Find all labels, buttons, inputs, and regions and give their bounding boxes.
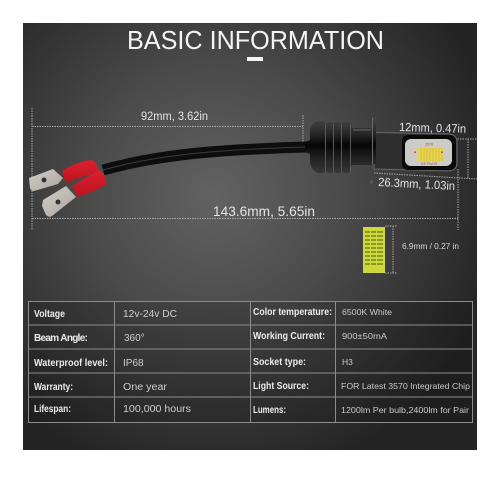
board contacts xyxy=(414,152,443,153)
chip lines xyxy=(421,148,442,161)
dimension label: head width: 12mm, 0.47in xyxy=(399,120,466,136)
specification table xyxy=(28,302,472,422)
terminal: lower xyxy=(42,170,107,217)
board marking: certification: CE RoHS xyxy=(421,162,438,166)
dimension label: chip size: 6.9mm / 0.27 in xyxy=(402,242,459,251)
title underline xyxy=(247,57,263,61)
head frame xyxy=(402,135,456,170)
specification table: IP68 xyxy=(123,358,144,369)
row: socket type: Socket type: xyxy=(253,357,306,368)
specification table: 900±50mA xyxy=(342,331,387,341)
specification table: 1200lm Per bulb,2400lm for Pair xyxy=(341,405,469,415)
specification table: 360° xyxy=(124,333,145,344)
specification table: FOR Latest 3570 Integrated Chip xyxy=(341,381,470,391)
yellow chip xyxy=(363,227,385,273)
row: lumens: Lumens: xyxy=(253,405,286,416)
grommet ribs xyxy=(326,124,350,171)
dimension label: cable length: 92mm, 3.62in xyxy=(141,111,208,123)
row: beam angle: Beam Angle: xyxy=(34,333,88,344)
row: color temperature: Color temperature: xyxy=(253,307,332,318)
row: working current: Working Current: xyxy=(253,331,325,342)
row: warranty: Warranty: xyxy=(34,382,73,393)
dimension lines xyxy=(32,108,477,273)
dimension label: total length: 143.6mm, 5.65in xyxy=(213,203,315,219)
specification table: 100,000 hours xyxy=(123,404,191,415)
dimension label: head length: 26.3mm, 1.03in xyxy=(378,175,455,193)
board marking: model: 3570 xyxy=(425,142,433,146)
flange foot xyxy=(370,180,373,184)
cable xyxy=(103,147,308,170)
led chip xyxy=(418,147,444,162)
background panel xyxy=(23,23,477,450)
specification table: 6500K White xyxy=(342,307,392,317)
led board xyxy=(405,139,452,166)
row: lifespan: Lifespan: xyxy=(34,404,71,415)
title: BASIC INFORMATION xyxy=(127,27,384,55)
flange highlight xyxy=(353,118,372,164)
specification table: One year xyxy=(123,382,168,393)
specification table: H3 xyxy=(342,357,353,367)
row: waterproof: Waterproof level: xyxy=(34,358,108,369)
specification table: 12v-24v DC xyxy=(123,309,177,320)
terminal: upper xyxy=(29,160,99,191)
row: voltage: Voltage xyxy=(34,309,65,320)
row: light source: Light Source: xyxy=(253,381,309,392)
bulb base xyxy=(305,117,376,184)
bulb head xyxy=(374,132,457,171)
